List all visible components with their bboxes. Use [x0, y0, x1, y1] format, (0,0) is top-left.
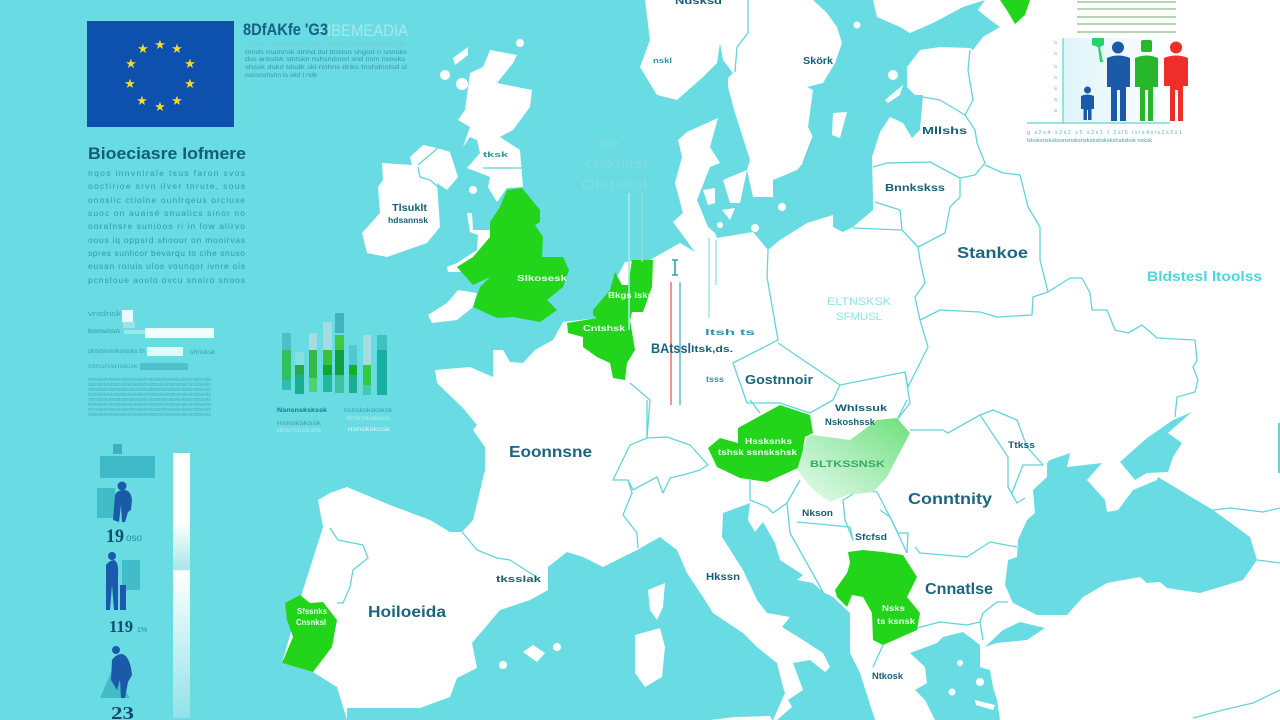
text block: body paragraph: suoc on auaisé snualics sinor no	[88, 208, 245, 218]
axis ticks: ls	[1054, 51, 1058, 56]
chart legend	[277, 408, 393, 434]
highlighted country: Balkans	[835, 550, 920, 645]
green marker	[1092, 38, 1104, 62]
map country labels: Eoonnsne	[509, 444, 592, 461]
axis ticks: ls	[1054, 108, 1058, 113]
text block: dense notes: dskdnskdsnsknsknsknsknskdskdnskdsnsknsknsknsknsknsknsknsknks	[88, 402, 211, 408]
chart caption: lsksksnskskssnsnsksnskskskskskshsksksk nsksk	[1027, 138, 1152, 144]
small Balearic islands	[499, 643, 561, 669]
person: red	[1164, 42, 1188, 121]
icon: EU flag: ★	[184, 56, 196, 71]
pale sea labels: ELTNSKSK	[827, 296, 892, 308]
icon: EU flag: ★	[154, 99, 166, 114]
map country labels: Skörk	[803, 56, 833, 67]
map labels on green countries: Hssksnks	[745, 437, 793, 446]
person: green	[1135, 40, 1158, 121]
pictogram panel	[1063, 38, 1178, 122]
heading: section title: Bioeciasre Iofmere	[88, 144, 246, 163]
text block: body paragraph: oous iq oppsrd shoour on mooirvas	[88, 235, 245, 245]
landmass: Finland	[873, 0, 985, 33]
chart legend: Nsnsnskskssk	[277, 408, 328, 414]
text block: dense notes: dskdnskdsnsknsknsknsknskdskdnskdsnsknsknsknsknsknsknsknsknks	[88, 382, 211, 388]
icon: EU flag: ★	[124, 76, 136, 91]
sea: Mediterranean	[347, 537, 785, 720]
row 3	[88, 347, 216, 356]
number 19: 19	[106, 526, 124, 547]
text block: body paragraph: eusan roiuis ulos vounqor ivnre ois	[88, 261, 245, 271]
icon: EU flag: ★	[171, 93, 183, 108]
text block: body paragraph: spres sunlicor bevarqu to cihe snuso	[88, 248, 245, 258]
pale sea labels: Glstsksl	[581, 177, 647, 192]
icon: person group 2	[106, 552, 140, 610]
icon: EU flag: ★	[125, 56, 137, 71]
text block: dense notes: nsknsknskdnsnsknsknsknsknsknsknsknsknsknsknsknsknsknsnskn	[88, 377, 211, 383]
icon: person group 3	[100, 646, 132, 698]
map labels on green countries: Slkosesk	[517, 274, 568, 283]
map country labels: Sfcfsd	[855, 532, 887, 542]
map country labels: ltsh ts	[705, 328, 756, 337]
bar 7	[363, 335, 371, 395]
chart: top right people pictogram	[1027, 2, 1188, 144]
highlighted country: Baltic corner	[1000, 0, 1030, 24]
number 119	[109, 617, 147, 636]
map country labels: Whlssuk	[835, 403, 888, 413]
map country labels: Gostnnoir	[745, 372, 813, 387]
map country labels: BAtssl	[651, 340, 691, 356]
map country labels: Bnnkskss	[885, 183, 946, 194]
header title block: mnds mamnsk stnhd dsl ttnstsn shgod n snnsks	[245, 49, 408, 56]
person: blue	[1107, 42, 1130, 121]
row 3: shnsksk	[190, 350, 216, 356]
text block: dense notes: dskdnskdsnsknsknsknsknskdskdnskdsnsknsknsknsknsknsknsknsknks	[88, 412, 211, 418]
row 3: dnstshsnksnsks ts	[88, 348, 146, 355]
chart legend: nsnskskssk	[348, 427, 391, 433]
map labels on green countries: BLTKSSNSK	[810, 459, 886, 469]
axis ticks: ls	[1054, 64, 1058, 69]
sea: Black Sea	[1005, 453, 1257, 615]
chart legend: nsnskskssk	[277, 421, 322, 427]
highlighted country: United Kingdom	[457, 188, 569, 322]
Aegean islands	[948, 660, 995, 710]
map country labels: Hkssn	[706, 572, 740, 583]
text block: body paragraph: ooctirioe srvn ilver tnrute, sous	[88, 181, 245, 191]
map country labels: Stankoe	[957, 245, 1028, 262]
text block: dense notes: dskdnskdsnsknsknsknsknskdskdnskdsnsknsknsknsknsknsknsknsknks	[88, 392, 211, 398]
landmass: northern and Baltic islands	[453, 47, 903, 220]
map country labels: Nskoshssk	[825, 417, 876, 427]
icon: EU flag: ★	[154, 37, 166, 52]
sea: Adriatic and Ionian	[722, 503, 875, 720]
landmass: Ireland	[362, 145, 458, 257]
pale sea labels: SFMUSL	[836, 311, 882, 323]
text block: dense notes: nsknsknskdnsnsknsknsknsknsknsknsknsknsknsknsknsknsknsnskn	[88, 387, 211, 393]
chart caption	[1027, 130, 1182, 144]
map country labels: tsss	[706, 375, 725, 384]
landmass: small round islands	[440, 22, 898, 232]
map labels on green countries: Sfssnks	[297, 607, 328, 616]
map country labels: ltsk,ds.	[691, 344, 733, 354]
header title block: dss ankslsk stntskn nshsndsnsl snd nsm nsnsks	[245, 56, 406, 63]
chart legend: dnsnsksksks	[277, 428, 321, 434]
text block: dense notes: nsknsknskdnsnsknsknsknsknsknsknsknsknsknsknsknsknsknsnskn	[88, 407, 211, 413]
row 4: ctnshsnsksk	[88, 363, 139, 370]
axis ticks: ls	[1054, 86, 1058, 91]
bar 6	[349, 345, 357, 393]
stacked bar chart	[277, 313, 393, 434]
number 119: 119	[109, 617, 133, 636]
map country labels: hdsannsk	[388, 216, 429, 225]
map labels on green countries: ts ksnsk	[877, 617, 916, 626]
axis ticks: ls	[1054, 75, 1058, 80]
map country labels: Hoiloeida	[368, 604, 446, 621]
bar 1	[282, 333, 291, 390]
highlighted country: Hungary	[797, 418, 910, 502]
axis ticks	[1054, 40, 1058, 113]
bar 4	[323, 322, 332, 392]
bar 2	[295, 352, 304, 394]
header title block: undcr tds lhshstd stnkslstn dslnkslsk	[245, 41, 406, 48]
text block: dense notes: nsknsknskdnsnsknsknsknsknsknsknsknsknsknsknsknsknsknsnskn	[88, 397, 211, 403]
map country labels: Nkson	[802, 508, 833, 518]
chart legend: dnsnsksksks	[346, 416, 390, 422]
map country labels: Mllshs	[922, 126, 968, 137]
text block: body paragraph: ooralnsre sunioos ri in low alirvo	[88, 221, 245, 231]
text block: dense notes	[88, 377, 211, 418]
person: small blue	[1081, 86, 1094, 120]
text block: body paragraph: onoslic ctiolne ounlrqeus orcluse	[88, 195, 245, 205]
text block: body paragraph: pcnstoue aoulo ovcu snoiro snoos	[88, 275, 245, 285]
pale sea labels	[581, 136, 1262, 323]
header title block	[243, 20, 409, 79]
row 2: bsnsnsn	[88, 329, 120, 335]
text block: body paragraph: nqos innvnlrale tsus faron svos	[88, 168, 245, 178]
map country labels	[368, 0, 1035, 681]
map labels on green countries: Cntshsk	[583, 324, 626, 333]
map country labels: Cnnatlse	[925, 581, 993, 598]
map country labels: nskl	[653, 58, 672, 65]
icon: person group 1	[97, 444, 155, 522]
map country labels: Tlsuklt	[392, 203, 428, 214]
text block: body paragraph	[88, 168, 245, 285]
map country labels: Ttkss	[1008, 440, 1035, 450]
scale caption: llu	[177, 440, 187, 449]
axis ticks: ls	[1054, 40, 1058, 45]
highlighted country: Portugal	[282, 595, 337, 672]
highlighted country: Austria	[708, 405, 813, 482]
islands: Corsica, Sardinia, Balearics, Sicily	[523, 583, 772, 720]
header title block: 8DfAKfe 'G3	[243, 20, 328, 39]
icon: EU flag: ★	[184, 76, 196, 91]
header title block: shssk dskd tdsdk skl nnhns dnks tnshdnstsd sl	[245, 64, 408, 71]
map labels on green countries: Nsks	[882, 604, 906, 613]
pale sea labels: Bldstesl ltoolss	[1147, 268, 1262, 284]
map labels on green countries	[296, 274, 916, 627]
icon: EU flag: ★	[171, 41, 183, 56]
map country labels: Ntkosk	[872, 671, 904, 681]
sea: Sea of Azov	[1120, 412, 1192, 480]
icon: EU flag	[87, 21, 234, 127]
header title block: - IBEMEADIA	[318, 21, 409, 40]
panel: people statistics	[97, 440, 190, 720]
map country labels: tksslak	[496, 574, 542, 584]
landmass: mainland Europe	[282, 0, 1280, 720]
highlighted country: Netherlands and Belgium	[567, 260, 653, 380]
vertical scale bar	[173, 453, 190, 718]
icon: EU flag: ★	[137, 41, 149, 56]
ruled lines	[1077, 2, 1176, 32]
pale sea labels: GlSK	[594, 136, 622, 151]
row 1: vntdnsk	[88, 311, 122, 318]
number 19	[106, 526, 143, 547]
map labels on green countries: tshsk ssnskshsk	[718, 448, 798, 457]
map labels on green countries: Cnsnksl	[296, 618, 326, 627]
sea: Aegean	[910, 632, 1000, 720]
chart legend: nsnsksksksksk	[344, 408, 393, 414]
map country labels: Conntnity	[908, 491, 992, 508]
map country labels: tksk	[483, 152, 508, 159]
header title block: nsnsnshshn ts skd t ndk	[245, 72, 318, 79]
map labels on green countries: Bkgs lsks	[608, 291, 654, 300]
axis ticks: ls	[1054, 97, 1058, 102]
horizontal bar chart	[88, 310, 216, 370]
icon: EU flag: ★	[136, 93, 148, 108]
landmass: Wales and Cornwall	[428, 213, 493, 323]
axis	[1027, 38, 1170, 123]
number 119: 1%	[137, 627, 147, 634]
map of Europe	[282, 0, 1280, 720]
landmass: Scotland and northern England	[458, 50, 532, 202]
bar 8	[377, 335, 387, 395]
country borders	[330, 0, 1280, 718]
landmass: Norway and Sweden	[640, 0, 842, 197]
pale sea labels: Gsknlrst	[586, 156, 649, 171]
chart caption: g s2s4 s2s2 s5 s2s1 f 2sl5 lsls4sls2s2s1	[1027, 130, 1182, 136]
map callout lines	[629, 193, 716, 405]
sea: Marmara	[985, 622, 1045, 647]
bar 3	[309, 333, 317, 392]
bar 5	[335, 313, 344, 393]
number 19: oso	[126, 533, 143, 544]
right edge marker	[1278, 423, 1280, 473]
